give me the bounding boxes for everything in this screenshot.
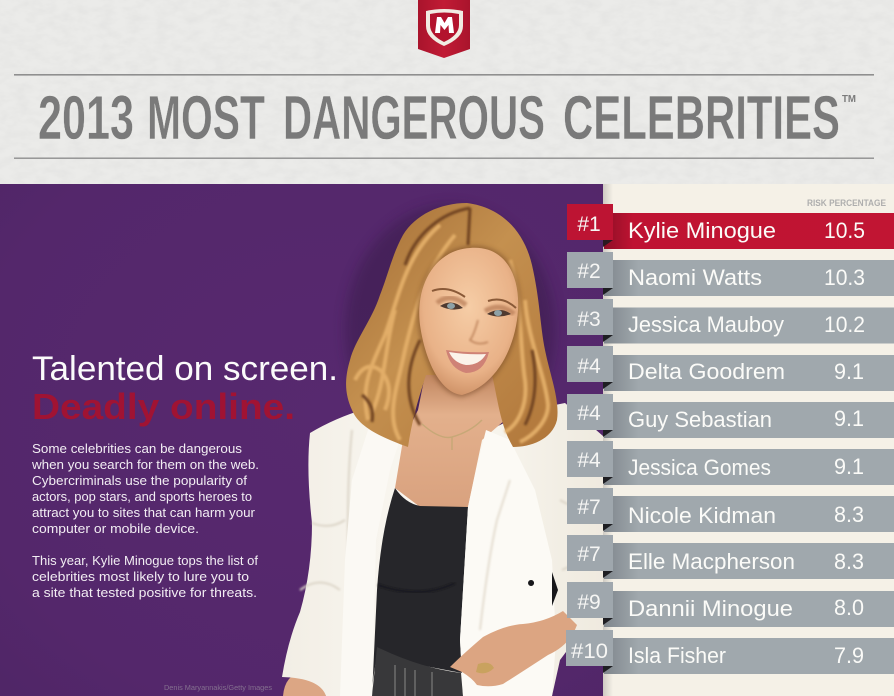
black top	[372, 488, 468, 696]
text block: description: attract you to sites that can harm your	[32, 505, 256, 520]
panel: purple background	[0, 184, 604, 696]
photo credit: Denis Maryannakis/Getty Images	[164, 683, 272, 692]
jacket buttons	[528, 572, 558, 606]
hair strands light	[355, 225, 548, 442]
ranking row 7: 8.3	[834, 502, 864, 527]
ranking row 6: 9.1	[834, 454, 864, 479]
ranking row 10: Isla Fisher	[628, 643, 726, 668]
text block: description: This year, Kylie Minogue tops the list of	[32, 553, 258, 568]
ranking row 4	[567, 346, 894, 391]
ranking row 9	[567, 582, 894, 627]
text block: description: computer or mobile device.	[32, 521, 199, 536]
ranking row 1: #1	[577, 213, 601, 236]
left arm skin	[283, 672, 326, 696]
ranking row 8: 8.3	[834, 549, 864, 574]
mouth	[446, 350, 489, 373]
ranking row 2: #2	[577, 260, 601, 283]
ranking row 2: 10.3	[824, 265, 865, 290]
ranking row 2	[567, 252, 894, 296]
ranking row 10: #10	[571, 640, 608, 663]
headline	[32, 350, 338, 427]
eyes	[440, 302, 511, 316]
ranking row 3: 10.2	[824, 312, 865, 337]
nose	[470, 320, 488, 344]
jacket sleeve shading	[300, 430, 600, 696]
text block: description: Cybercriminals use the popularity of	[32, 473, 247, 488]
eye shadow	[437, 298, 514, 314]
text block: description: Some celebrities can be dangerous	[32, 441, 243, 456]
ranking row 6: #4	[577, 449, 601, 472]
ranking row 8	[567, 535, 894, 579]
ranking row 4: 9.1	[834, 359, 864, 384]
title: 2013 Most Dangerous Celebrities: 2013	[38, 84, 134, 153]
ranking row 4: Delta Goodrem	[628, 359, 785, 384]
ranking row 8: #7	[577, 543, 601, 566]
hair back mass	[346, 203, 558, 447]
ranking row 7: #7	[577, 496, 601, 519]
icon: McAfee shield logo banner	[418, 0, 470, 58]
ranking row 5: 9.1	[834, 406, 864, 431]
jacket right lapel	[460, 430, 556, 696]
jacket back and sleeves	[282, 403, 603, 696]
title: 2013 Most Dangerous Celebrities	[38, 84, 856, 153]
ranking row 9: #9	[577, 591, 601, 614]
title: 2013 Most Dangerous Celebrities: TM	[842, 94, 856, 105]
header paper background	[0, 0, 894, 184]
ranking row 1	[567, 204, 894, 249]
ranking row 7	[567, 488, 894, 532]
ranking row 9: Dannii Minogue	[628, 596, 793, 621]
headline: Talented on screen.	[32, 350, 338, 388]
hair back glow	[345, 205, 555, 455]
ranking row 9: 8.0	[834, 595, 864, 620]
title rule top	[14, 74, 874, 76]
ranking row 6: Jessica Gomes	[628, 455, 771, 480]
ranking row 1: 10.5	[824, 218, 865, 243]
face	[419, 248, 518, 395]
leather skirt	[372, 647, 463, 696]
text block: description: a site that tested positive for threats.	[32, 585, 257, 600]
panel: ranking paper background	[603, 184, 894, 696]
ranking row 3: #3	[577, 308, 601, 331]
ranking row 10: 7.9	[834, 643, 864, 668]
headline: Deadly online.	[32, 386, 295, 427]
ranking row 4: #4	[577, 355, 601, 378]
neck and chest	[395, 375, 505, 507]
ranking row 3: Jessica Mauboy	[628, 312, 785, 337]
face shadow	[417, 246, 520, 397]
ranking row 8: Elle Macpherson	[628, 549, 795, 574]
title: 2013 Most Dangerous Celebrities: DANGEROUS	[283, 84, 545, 153]
title: 2013 Most Dangerous Celebrities: MOST	[147, 84, 265, 153]
hand	[450, 611, 577, 686]
illustration: celebrity portrait	[282, 203, 603, 696]
ranking row 5	[567, 394, 894, 438]
text block: description: when you search for them on the web.	[31, 457, 259, 472]
ranking row 6	[567, 441, 894, 485]
hair strands dark	[362, 208, 535, 425]
ranking row 2: Naomi Watts	[628, 265, 762, 290]
text block: description: celebrities most likely to lure you to	[32, 569, 249, 584]
title rule bottom	[14, 158, 874, 159]
jacket left lapel	[340, 430, 403, 696]
text block: description	[31, 441, 259, 600]
ranking row 7: Nicole Kidman	[628, 503, 776, 528]
eyebrows	[432, 289, 516, 308]
ranking row 5: Guy Sebastian	[628, 407, 772, 432]
ranking row 10	[566, 630, 894, 674]
necklace	[422, 420, 482, 450]
text block: description: actors, pop stars, and sports heroes to	[32, 489, 252, 504]
ranking row 5: #4	[577, 402, 601, 425]
ranking row 3	[567, 299, 894, 344]
ranking row 1: Kylie Minogue	[628, 218, 776, 243]
